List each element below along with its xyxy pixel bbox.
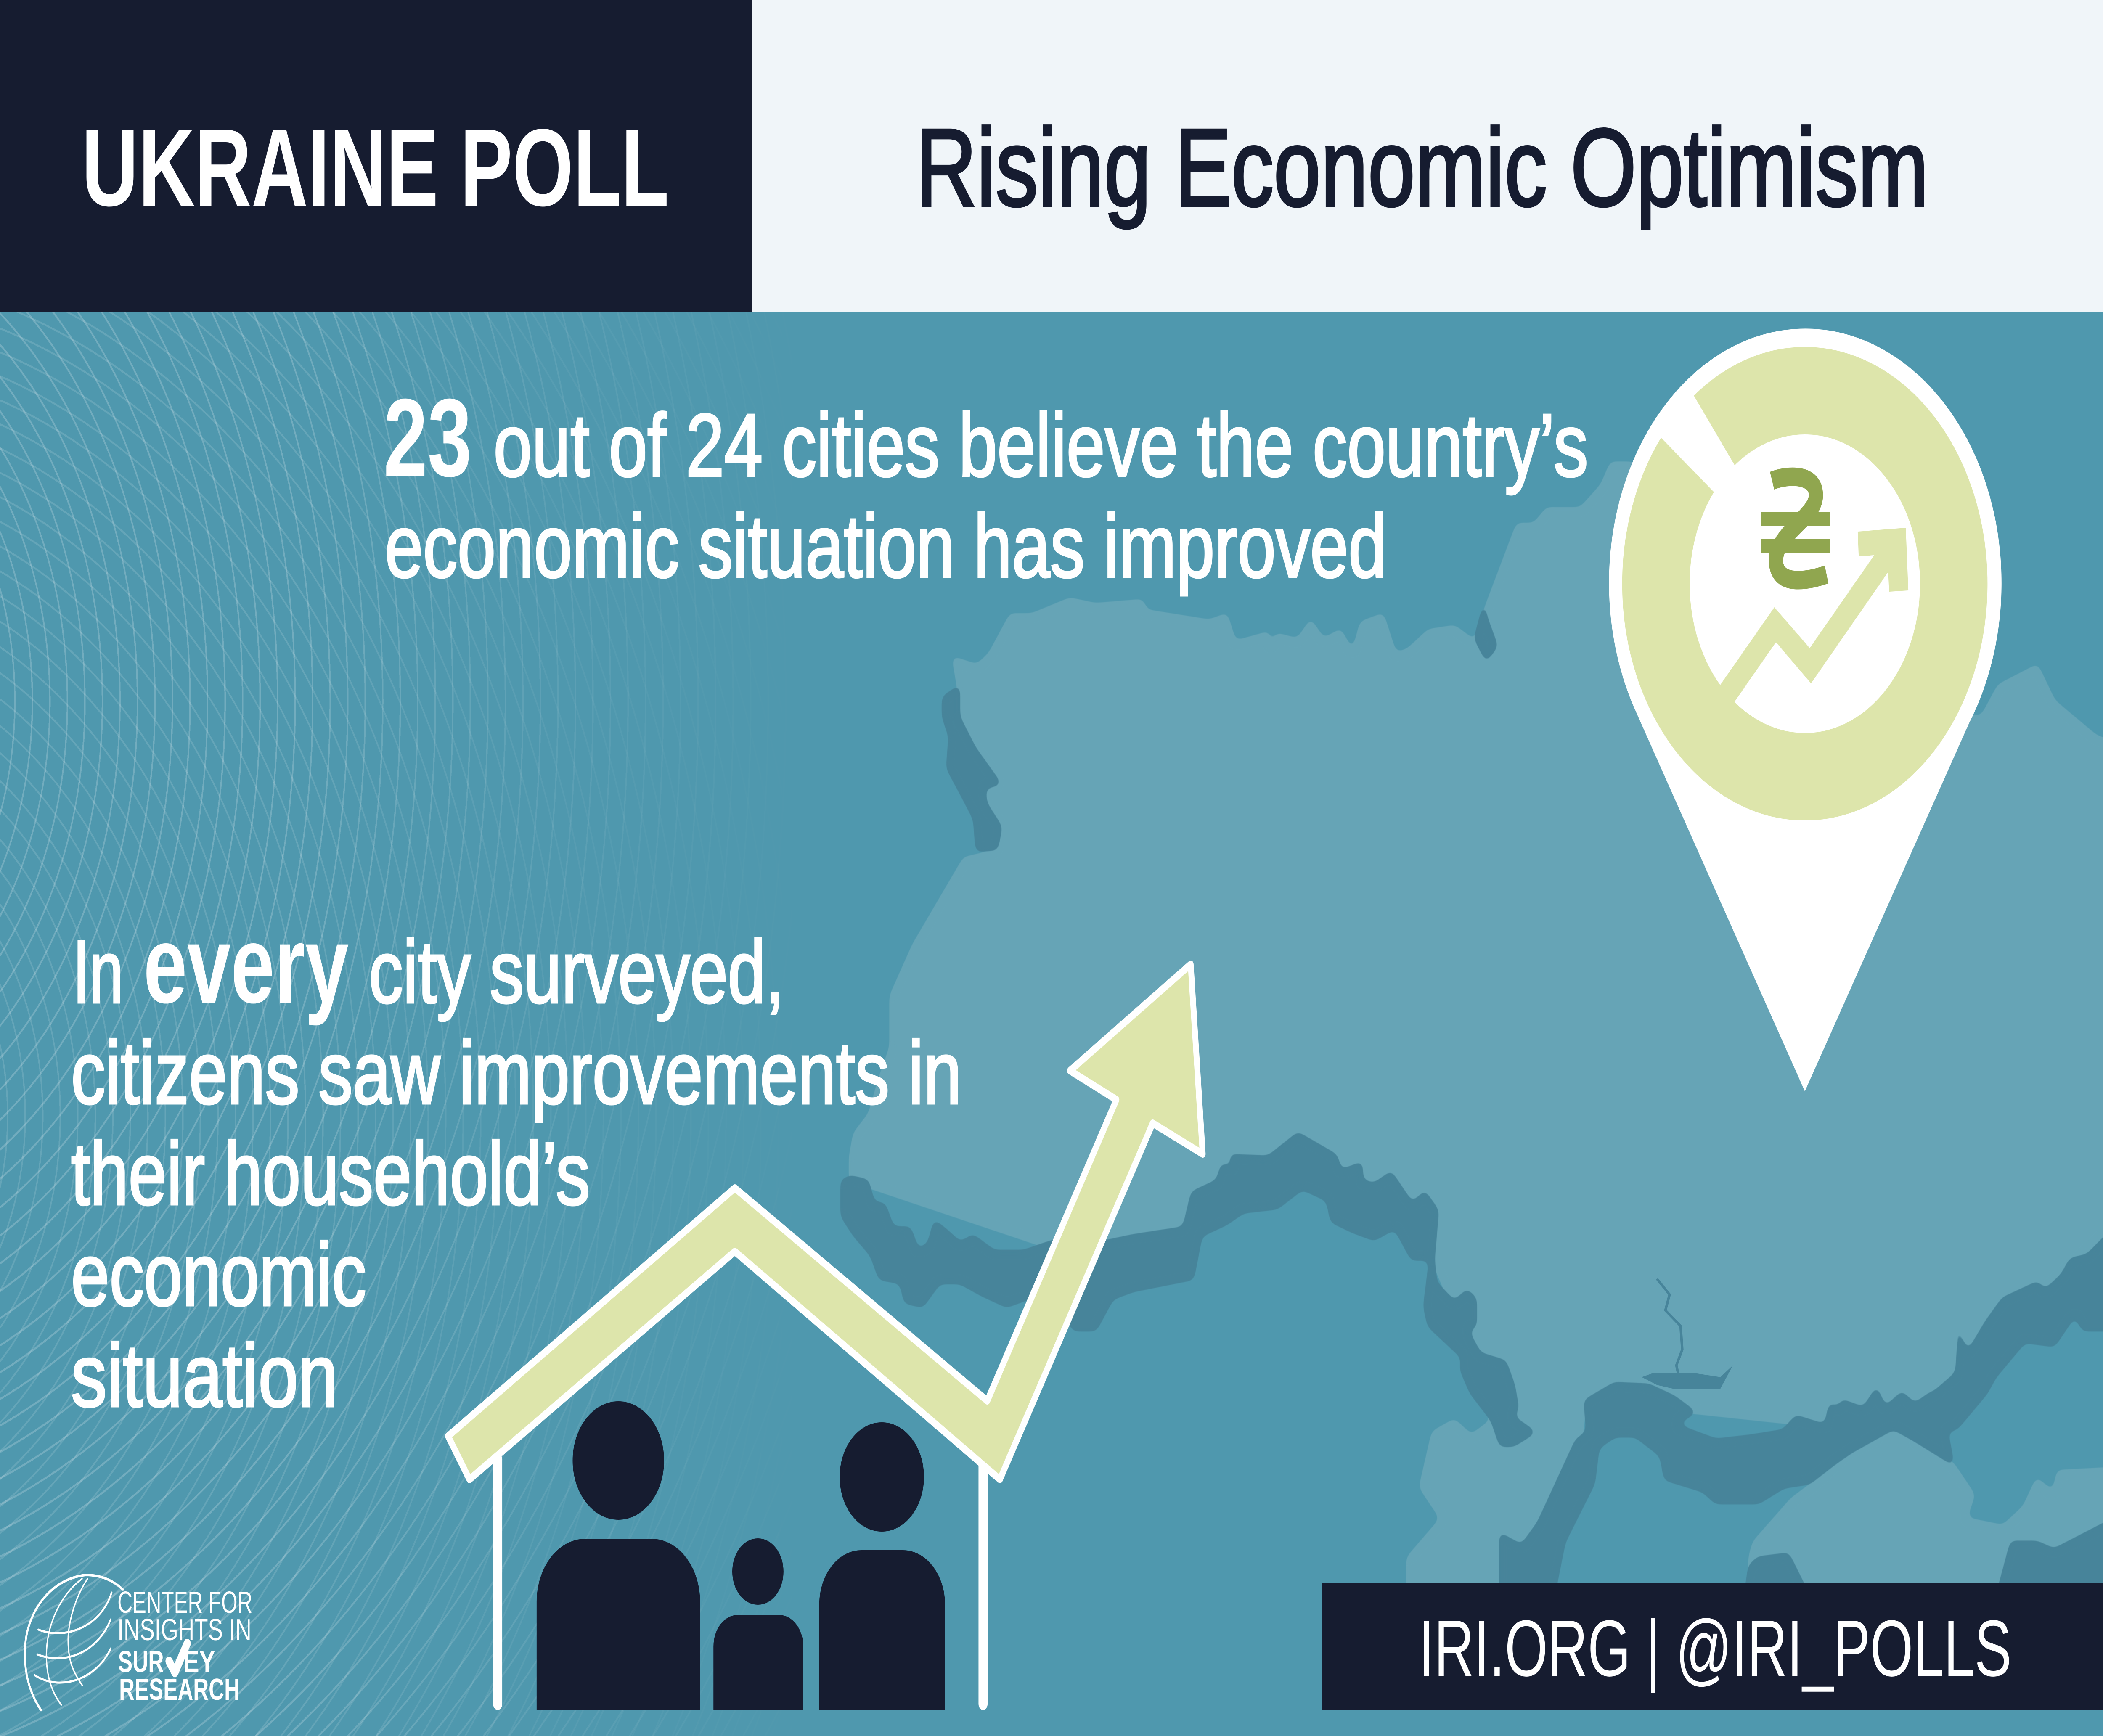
text block: in every city surveyed xyxy=(71,903,961,1426)
title: Ukraine Poll: UKRAINE POLL xyxy=(82,106,669,229)
text block: in every city surveyed: economic xyxy=(71,1225,366,1325)
icon: house walls xyxy=(498,1459,983,1704)
text block: 23 out of 24 cities: 23 xyxy=(384,376,472,500)
header: dark panel xyxy=(0,0,752,312)
map: coastal shadows xyxy=(842,607,2103,1735)
adult right xyxy=(819,1422,945,1710)
map: mainland xyxy=(850,463,2103,1605)
logo: wordmark xyxy=(117,1585,252,1707)
text block: 23 out of 24 cities: economic situation has improved xyxy=(385,497,1387,596)
logo: wordmark: SUR xyxy=(118,1645,164,1679)
text block: in every city surveyed: every xyxy=(143,903,349,1026)
icon: location pin with hryvnia chart xyxy=(1609,328,2002,1091)
logo: Center for Insights in Survey Research xyxy=(25,1575,252,1710)
title: Rising Economic Optimism: Rising Economic Optimism xyxy=(916,106,1928,229)
child xyxy=(713,1538,803,1710)
text block: 23 out of 24 cities: out of 24 cities believe the country’s xyxy=(493,396,1588,495)
text block: in every city surveyed: citizens saw improvements in xyxy=(71,1024,961,1123)
adult left xyxy=(537,1401,700,1710)
map: Crimea and southeast land xyxy=(1750,1428,2103,1605)
map of Ukraine xyxy=(842,463,2103,1735)
map: north shadow tip xyxy=(1475,607,1496,659)
icon: family xyxy=(537,1401,945,1710)
map: southeast shadow xyxy=(1995,1511,2103,1605)
map: northwest shadow xyxy=(943,687,1001,850)
map: Crimea shadow xyxy=(1744,1554,1813,1605)
map: shadow below footer bar xyxy=(1834,1684,1887,1735)
logo: wordmark: CENTER FOR xyxy=(117,1585,252,1620)
text block: 23 out of 24 cities xyxy=(384,376,1588,596)
pin: white body xyxy=(1609,328,2002,1091)
map: Black Sea coast shadow xyxy=(1501,1384,1952,1605)
map: Azov coast shadow xyxy=(1934,1212,2103,1432)
pin: ring gap xyxy=(1654,387,1735,492)
text block: in every city surveyed: In xyxy=(73,923,123,1022)
text block: in every city surveyed: situation xyxy=(71,1326,338,1426)
icon: rising arrow roof xyxy=(448,964,1202,1479)
logo: wordmark: EY xyxy=(183,1645,215,1679)
logo: wordmark: RESEARCH xyxy=(119,1672,240,1707)
header: light panel xyxy=(752,0,2103,312)
logo: wordmark: INSIGHTS IN xyxy=(117,1613,252,1647)
pin: donut ring xyxy=(1656,391,1954,777)
text block: in every city surveyed: city surveyed, xyxy=(369,923,784,1022)
logo: globe xyxy=(25,1575,123,1710)
map: Dnieper river and estuary xyxy=(1642,1279,1733,1389)
logo: check mark xyxy=(169,1643,187,1672)
map: western and southern border shadow xyxy=(842,1133,1534,1445)
pin: rising line arrow xyxy=(1710,528,1908,711)
footer text: website and handle: IRI.ORG | @IRI_POLLS xyxy=(1419,1604,2011,1693)
map: land masses xyxy=(850,463,2103,1605)
text block: in every city surveyed: their household’s xyxy=(71,1125,590,1224)
footer bar xyxy=(1322,1583,2103,1710)
pin: hryvnia symbol xyxy=(1761,477,1830,580)
